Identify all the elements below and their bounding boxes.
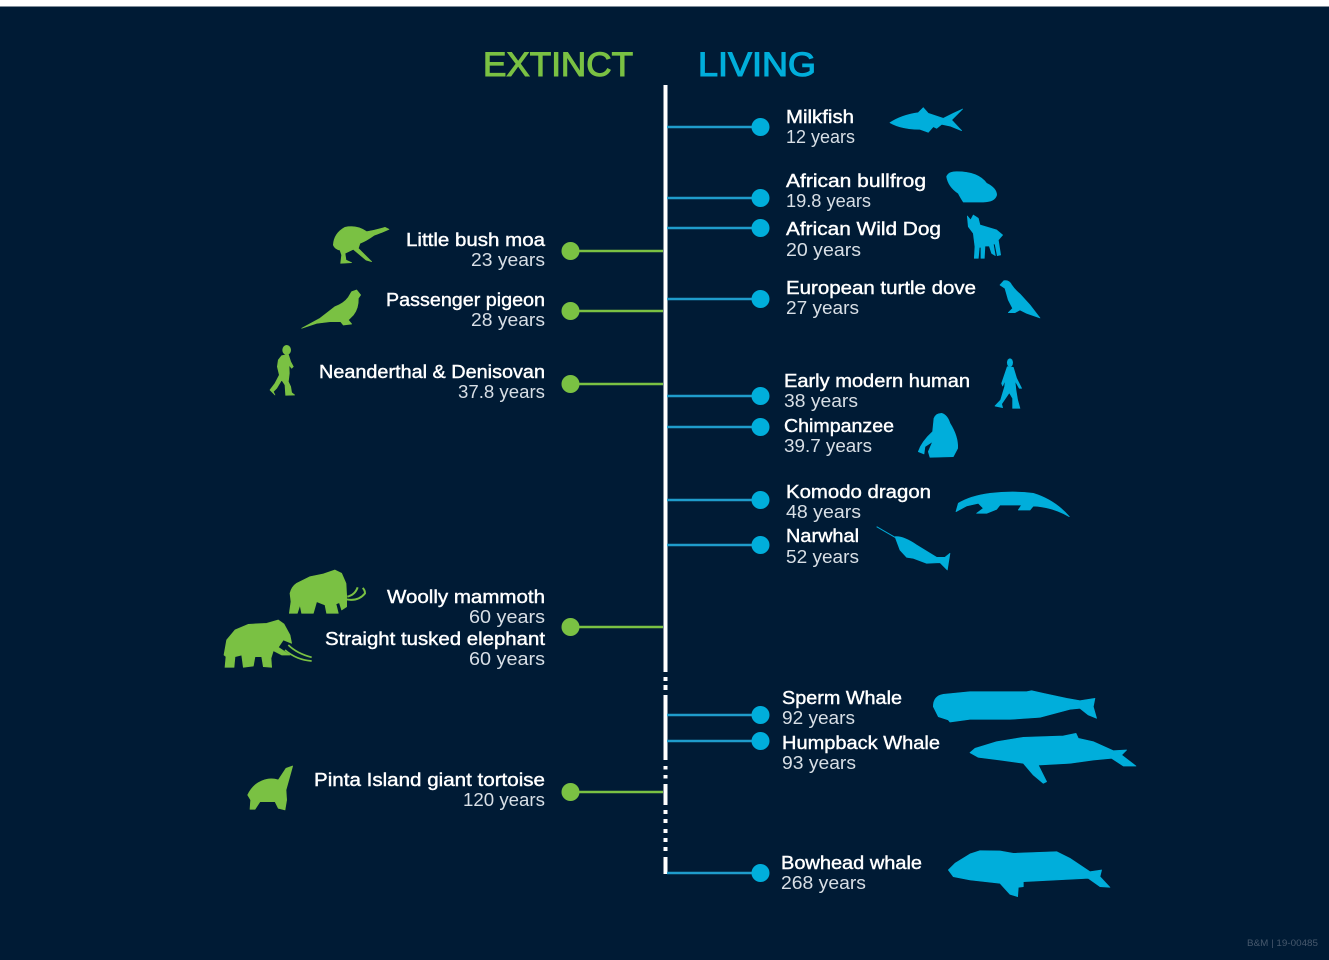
entry: little bush moa: 23 years [471, 250, 545, 270]
entry: sperm whale: 92 years [782, 708, 855, 728]
entry: early modern human: Early modern human [784, 371, 970, 391]
entry: sperm whale [667, 688, 1097, 728]
entry: little bush moa: Little bush moa [406, 230, 546, 250]
entry: african wild dog: 20 years [786, 240, 861, 260]
entry: early modern human [667, 358, 1022, 411]
entry: african bullfrog [667, 171, 997, 211]
entry: chimpanzee: 39.7 years [784, 436, 872, 456]
entry: humpback whale: Humpback Whale [782, 733, 940, 753]
entry: woolly mammoth and straight tusked elephant: Woolly mammoth [387, 587, 545, 607]
entry: narwhal [667, 526, 950, 570]
entry: little bush moa [333, 227, 663, 270]
entry: humpback whale [667, 732, 1136, 783]
entry: komodo dragon: 48 years [786, 502, 861, 522]
entry: woolly mammoth and straight tusked elephant [224, 570, 663, 669]
entry: woolly mammoth and straight tusked elephant: 60 years [469, 649, 545, 669]
entry: milkfish: 12 years [786, 127, 855, 147]
entry: pinta island giant tortoise [248, 766, 663, 810]
heading: living: LIVING [698, 46, 816, 84]
entry: pinta island giant tortoise: Pinta Island giant tortoise [314, 770, 545, 790]
entry: woolly mammoth and straight tusked elephant: Straight tusked elephant [325, 629, 545, 649]
entry: passenger pigeon: 28 years [471, 310, 545, 330]
panel: living species [667, 107, 1136, 897]
entry: sperm whale: Sperm Whale [782, 688, 902, 708]
entry: chimpanzee: Chimpanzee [784, 416, 894, 436]
entry: woolly mammoth and straight tusked elephant: 60 years [469, 607, 545, 627]
entry: neanderthal and denisovan: 37.8 years [458, 382, 545, 402]
entry: humpback whale: 93 years [782, 753, 856, 773]
entry: bowhead whale: 268 years [781, 873, 866, 893]
entry: bowhead whale: Bowhead whale [781, 853, 922, 873]
entry: milkfish: Milkfish [786, 107, 854, 127]
entry: narwhal: Narwhal [786, 526, 859, 546]
entry: early modern human: 38 years [784, 391, 858, 411]
entry: komodo dragon: Komodo dragon [786, 482, 931, 502]
entry: european turtle dove: European turtle dove [786, 278, 976, 298]
entry: neanderthal and denisovan: Neanderthal & Denisovan [319, 362, 545, 382]
entry: european turtle dove: 27 years [786, 298, 859, 318]
entry: komodo dragon [667, 482, 1069, 522]
entry: narwhal: 52 years [786, 547, 859, 567]
entry: european turtle dove [667, 278, 1040, 318]
entry: african bullfrog: 19.8 years [786, 191, 871, 211]
timeline axis [664, 85, 668, 874]
entry: african wild dog: African Wild Dog [786, 219, 941, 239]
entry: passenger pigeon [302, 290, 663, 330]
credit line: B&M | 19-00485 [1247, 938, 1318, 949]
panel: extinct species [224, 227, 663, 810]
entry: milkfish [667, 107, 963, 147]
entry: pinta island giant tortoise: 120 years [463, 790, 545, 810]
heading: extinct: EXTINCT [483, 46, 633, 84]
entry: african wild dog [667, 215, 1003, 260]
entry: chimpanzee [667, 413, 958, 457]
entry: neanderthal and denisovan [270, 345, 663, 402]
entry: african bullfrog: African bullfrog [786, 171, 926, 191]
entry: passenger pigeon: Passenger pigeon [386, 290, 545, 310]
entry: bowhead whale [667, 851, 1110, 897]
